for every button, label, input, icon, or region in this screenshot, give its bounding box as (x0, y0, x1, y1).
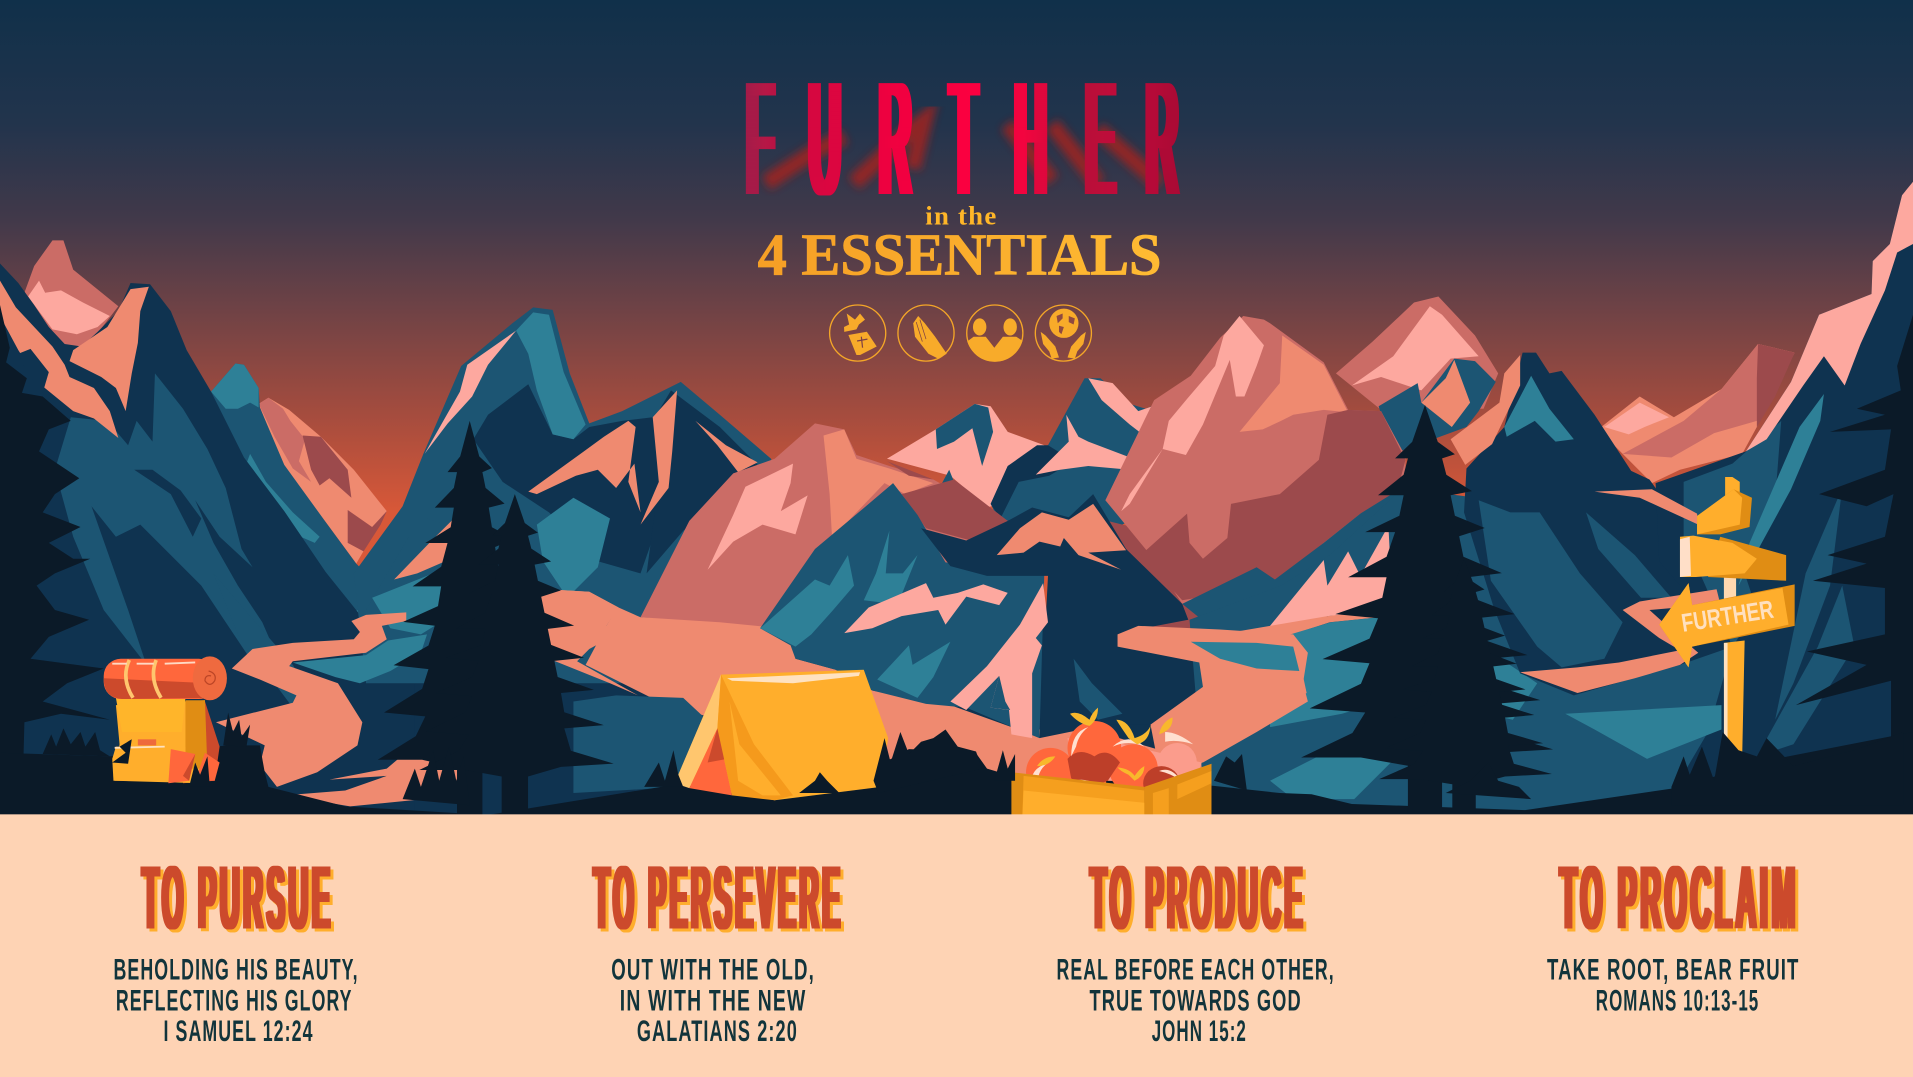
right teal peak mountain (1451, 353, 1732, 695)
grass tufts (43, 712, 1903, 805)
teal back mountain (211, 364, 415, 647)
pink center peaks and blue mountain (887, 373, 1202, 573)
column: to proclaim: ROMANS 10:13-15 (1596, 985, 1759, 1018)
far right rose peak (1336, 296, 1498, 454)
pine tree left small (419, 494, 614, 815)
center-left teal mountain (354, 307, 781, 683)
center river lake (525, 588, 1220, 793)
title FURTHER: FURTHER (747, 48, 1178, 228)
column: to produce: REAL BEFORE EACH OTHER, (1057, 954, 1335, 987)
column: to pursue (113, 847, 359, 1048)
column: to produce: JOHN 15:2 (1152, 1015, 1247, 1048)
center dark navy mountain (921, 494, 1203, 738)
icon: globe in hands (1035, 305, 1091, 361)
left navy mountain (0, 264, 415, 815)
valley base (0, 622, 1913, 815)
column: to produce: TRUE TOWARDS GOD (1089, 985, 1302, 1018)
right blue base (1190, 488, 1913, 815)
far left peak (24, 240, 118, 354)
column: to proclaim (1547, 847, 1800, 1018)
icon: praying hands (898, 305, 954, 361)
right winding river (1520, 489, 1721, 759)
bottom band (0, 814, 1913, 1077)
tent (675, 670, 888, 800)
center rose mountain (641, 423, 1008, 628)
teal lake (1191, 642, 1299, 671)
column: to pursue: BEHOLDING HIS BEAUTY, (113, 954, 359, 987)
column: to persevere (594, 847, 844, 1048)
right salmon river lake (1118, 626, 1308, 769)
back salmon slope (259, 398, 387, 564)
crate of apples (1011, 708, 1211, 815)
pine tree right large (1301, 405, 1553, 815)
signpost (1659, 477, 1795, 799)
column: to persevere: GALATIANS 2:20 (637, 1015, 798, 1048)
right forest wall (1796, 315, 1913, 815)
column: to pursue: REFLECTING HIS GLORY (116, 985, 353, 1018)
infographic canvas: TO PERSEVERE (594, 847, 844, 948)
center blue mountain (760, 483, 1044, 738)
far right ridge (1598, 344, 1795, 483)
background sky (0, 0, 1913, 683)
infographic canvas: TO PRODUCE (1090, 847, 1306, 948)
infographic canvas: TO PURSUE (142, 847, 334, 948)
subtitle in the: in the (925, 200, 997, 230)
pine tree right small (1379, 559, 1552, 815)
sign label: FURTHER (1680, 596, 1776, 638)
column: to persevere: IN WITH THE NEW (620, 985, 806, 1018)
icon: two people (966, 304, 1024, 362)
backpack (104, 656, 227, 783)
landscape illustration (0, 182, 1913, 815)
pine tree left large (378, 421, 565, 815)
icon: dove and bible (830, 305, 886, 361)
column: to produce (1057, 847, 1335, 1048)
header block (746, 83, 1180, 362)
subtitle 4 essentials: 4 ESSENTIALS (758, 221, 1161, 287)
big rose mountain (1098, 316, 1405, 640)
foreground ground silhouette (0, 732, 1913, 815)
column: to persevere: OUT WITH THE OLD, (611, 954, 815, 987)
right big mountain (1656, 182, 1913, 815)
left river (216, 588, 638, 806)
left forest wall (0, 305, 110, 815)
ghost mountain behind title (766, 120, 1159, 183)
column: to pursue: I SAMUEL 12:24 (163, 1015, 314, 1048)
